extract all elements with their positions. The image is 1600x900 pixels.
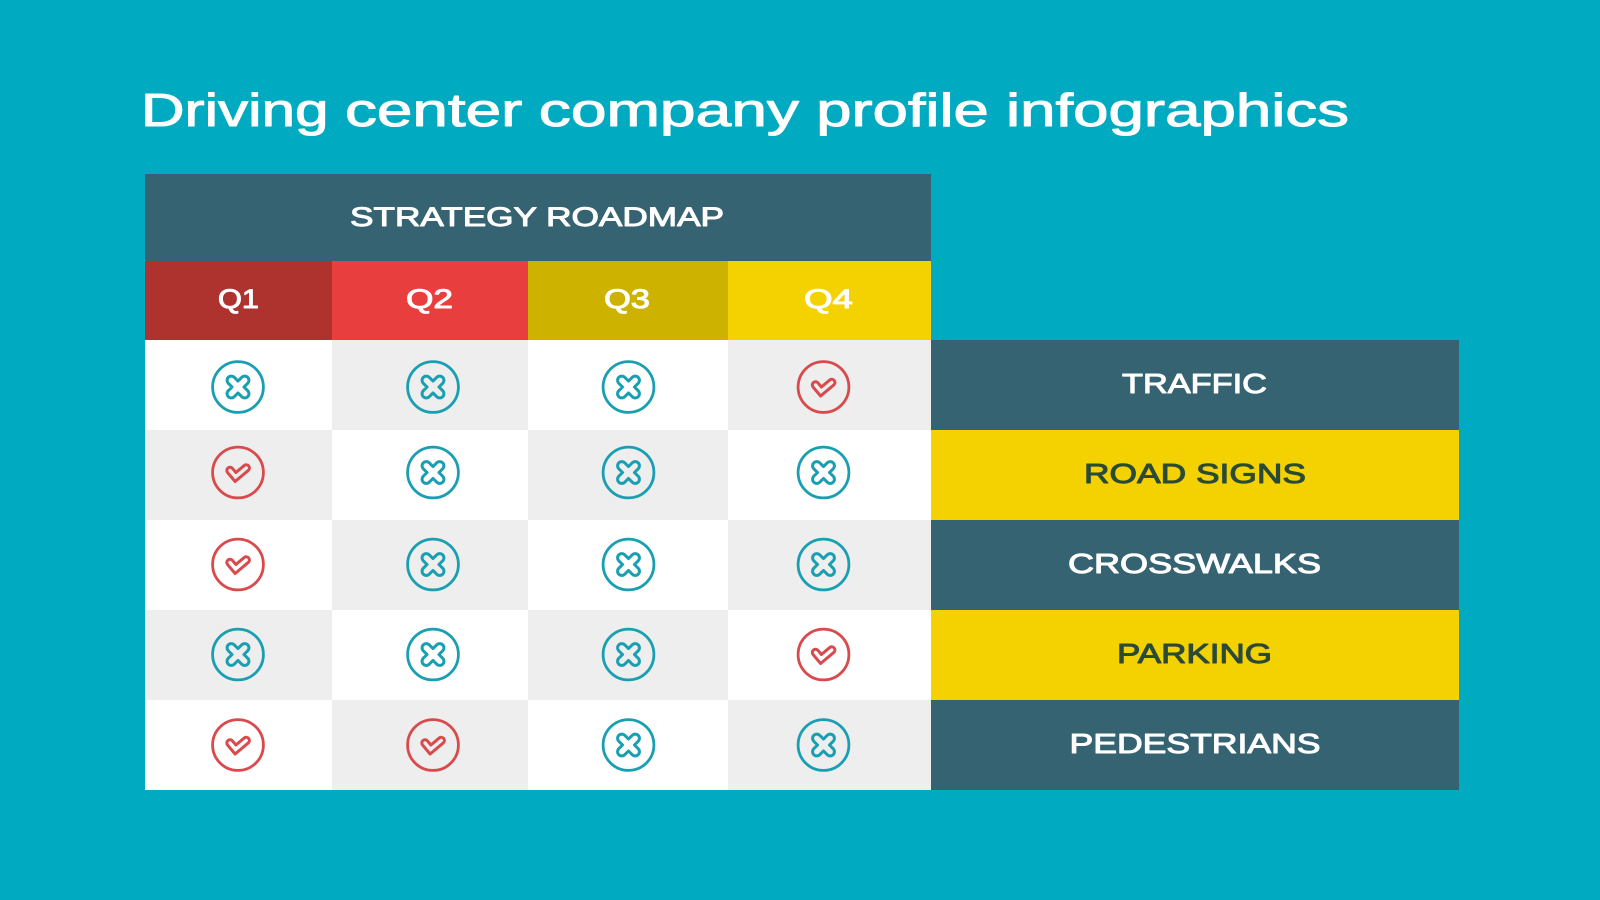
icons: status marks bbox=[213, 362, 849, 770]
icon: check Q2 pedestrians bbox=[408, 720, 458, 770]
quarter header: Q1 bbox=[145, 261, 332, 340]
quarter header: Q2: Q2 bbox=[406, 284, 453, 314]
icon: cross Q3 traffic bbox=[603, 362, 654, 412]
row label: parking: PARKING bbox=[1117, 638, 1272, 669]
icon: cross Q1 parking bbox=[213, 629, 263, 680]
icon: check Q1 road signs bbox=[213, 447, 263, 498]
row label: road signs: ROAD SIGNS bbox=[1084, 458, 1306, 489]
icon: cross Q2 road signs bbox=[408, 447, 458, 498]
row label: road signs bbox=[931, 430, 1459, 520]
grid: checkerboard cells bbox=[145, 340, 931, 790]
heading: strategy roadmap bbox=[145, 174, 931, 261]
quarter header: Q3 bbox=[528, 261, 728, 340]
icon: check Q4 traffic bbox=[798, 362, 849, 412]
row label: pedestrians: PEDESTRIANS bbox=[1070, 728, 1320, 759]
quarter header: Q2 bbox=[332, 261, 528, 340]
icon: cross Q3 pedestrians bbox=[603, 720, 654, 770]
icon: cross Q2 crosswalks bbox=[408, 539, 458, 590]
icon: check Q4 parking bbox=[798, 629, 849, 680]
icon: cross Q3 parking bbox=[603, 629, 654, 680]
row label: traffic bbox=[931, 340, 1459, 430]
quarter header: Q1: Q1 bbox=[218, 284, 259, 314]
row label: traffic: TRAFFIC bbox=[1122, 368, 1267, 399]
row label: pedestrians bbox=[931, 700, 1459, 790]
icon: cross Q2 traffic bbox=[408, 362, 458, 412]
icon: cross Q1 traffic bbox=[213, 362, 263, 412]
icon: cross Q3 road signs bbox=[603, 447, 654, 498]
quarter header: Q4: Q4 bbox=[804, 284, 853, 314]
panel: row labels bbox=[931, 340, 1459, 790]
icon: cross Q4 road signs bbox=[798, 447, 849, 498]
title: infographics bbox=[1006, 84, 1349, 136]
icon: cross Q4 pedestrians bbox=[798, 720, 849, 770]
icon: cross Q2 parking bbox=[408, 629, 458, 680]
title: center bbox=[345, 84, 522, 136]
icon: check Q1 crosswalks bbox=[213, 539, 263, 590]
title: company bbox=[539, 84, 799, 136]
row label: crosswalks: CROSSWALKS bbox=[1068, 548, 1321, 579]
row label: crosswalks bbox=[931, 520, 1459, 610]
icon: cross Q3 crosswalks bbox=[603, 539, 654, 590]
panel: strategy roadmap table bbox=[145, 174, 931, 790]
title: profile bbox=[816, 84, 989, 136]
heading: strategy roadmap: STRATEGY ROADMAP bbox=[350, 202, 724, 232]
icon: check Q1 pedestrians bbox=[213, 720, 263, 770]
quarter header: Q4 bbox=[728, 261, 931, 340]
title: Driving bbox=[141, 84, 329, 136]
title bbox=[141, 84, 1349, 136]
icon: cross Q4 crosswalks bbox=[798, 539, 849, 590]
row label: parking bbox=[931, 610, 1459, 700]
quarter header: Q3: Q3 bbox=[604, 284, 650, 314]
